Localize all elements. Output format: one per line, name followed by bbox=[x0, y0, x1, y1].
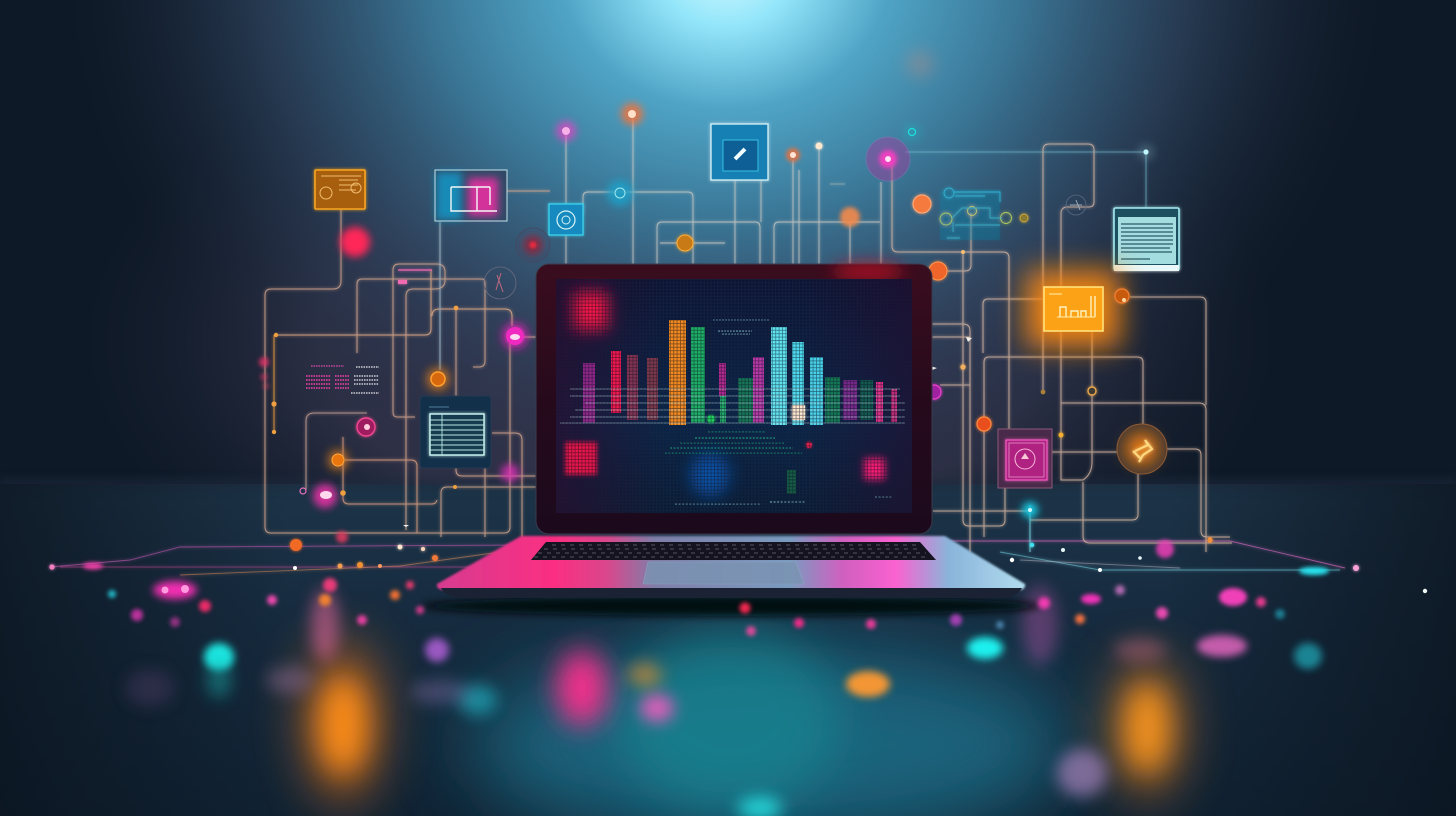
bottom readout bbox=[675, 497, 892, 504]
icon: top blue panel bbox=[711, 124, 768, 180]
right network nodes bbox=[927, 385, 1096, 518]
laptop base shadow bbox=[422, 596, 1042, 616]
left network wires bbox=[265, 191, 550, 537]
floor glowing particles bbox=[49, 531, 1427, 636]
icon: orange document card bbox=[315, 170, 365, 209]
orange node beside chart card bbox=[1115, 289, 1129, 303]
right network wires bbox=[892, 144, 1232, 552]
laptop base front edge bbox=[441, 588, 1022, 598]
icon: pink gauge panel bbox=[998, 429, 1052, 488]
green legend lines bbox=[665, 432, 802, 453]
pink glow marker bbox=[864, 458, 885, 480]
screen red glow bbox=[574, 292, 608, 330]
top right nodes bbox=[786, 128, 1149, 371]
icon: cyan and pink chart card bbox=[435, 170, 507, 221]
keyboard bbox=[531, 542, 936, 560]
reflective floor bbox=[0, 478, 1456, 816]
floor colour reflections bbox=[126, 585, 1322, 816]
top centre wires bbox=[566, 118, 881, 264]
icon: dim circle marks bbox=[484, 195, 1086, 299]
icon: dark document window bbox=[420, 396, 491, 468]
bar chart bbox=[560, 320, 905, 425]
text block: pink data table bbox=[306, 366, 379, 393]
lid red glow bbox=[832, 263, 904, 281]
laptop lid bbox=[536, 264, 932, 534]
small red dot bbox=[806, 442, 812, 448]
glowing red blob bbox=[340, 227, 370, 257]
pink square marker bbox=[565, 442, 597, 475]
laptop bbox=[422, 263, 1042, 616]
icon: teal circuit cluster bbox=[940, 188, 1028, 240]
left network nodes bbox=[259, 103, 693, 527]
screen blue glow bbox=[690, 453, 730, 497]
floor circuit traces bbox=[50, 541, 1345, 575]
laptop base deck bbox=[437, 536, 1025, 590]
icon: teal document window bbox=[1114, 208, 1179, 271]
screen bbox=[556, 279, 912, 513]
icon: orange circular emblem bbox=[1117, 424, 1167, 474]
trackpad bbox=[643, 562, 804, 584]
chart caption lines bbox=[713, 320, 770, 334]
icon: blue sphere card bbox=[549, 204, 583, 235]
icon: glowing orange chart card bbox=[1026, 270, 1120, 348]
icon: left small pink panel bbox=[398, 270, 432, 284]
